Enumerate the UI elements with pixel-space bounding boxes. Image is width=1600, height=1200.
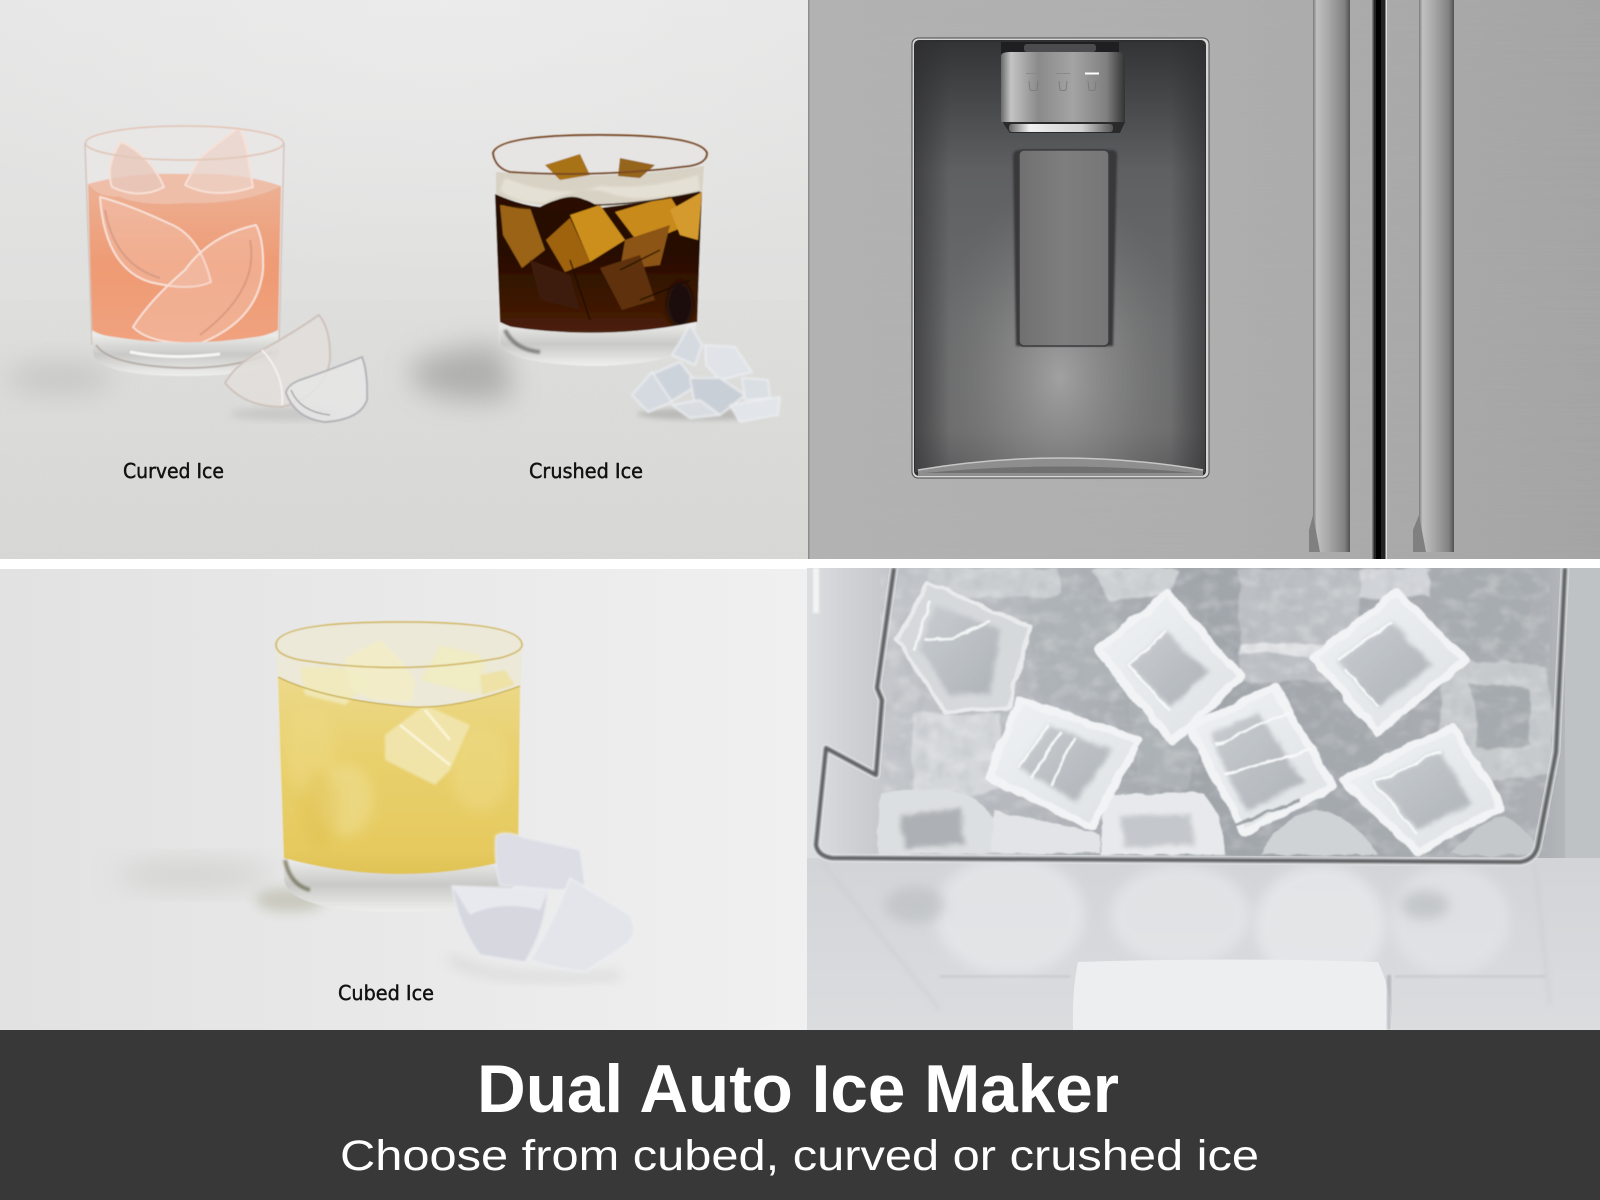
ice block: cube E xyxy=(1343,727,1502,852)
ice block: cube A xyxy=(1098,593,1241,742)
glass: curved ice drink xyxy=(85,126,284,376)
ice: cubes in glass xyxy=(300,640,515,785)
label: curved ice: Curved Ice xyxy=(123,459,224,483)
ice: curved pieces in glass xyxy=(100,128,263,343)
ice blocks: back rounded cube xyxy=(897,583,1030,712)
panel: ice bin full of cubes xyxy=(807,568,1600,1030)
label: cubed ice: Cubed Ice xyxy=(338,981,434,1005)
shadow: cubed ice glass xyxy=(115,863,275,887)
ice texture overlay xyxy=(880,568,1550,858)
dispenser head with ice mode indicators xyxy=(1001,42,1125,133)
ice above liquid xyxy=(496,166,704,207)
ice blocks: bottom row xyxy=(877,790,1540,855)
glass base xyxy=(499,322,696,366)
glass rim xyxy=(276,622,522,668)
glass rim xyxy=(86,126,284,160)
indicator: glyphs xyxy=(1029,81,1096,90)
bin handle block xyxy=(1073,960,1392,1030)
ice block: cube D xyxy=(1190,687,1333,833)
door handle: right xyxy=(1413,0,1454,552)
indicator: bars xyxy=(1026,73,1040,74)
icon: curved ice on table xyxy=(225,315,367,422)
glass base xyxy=(284,858,518,912)
shadow: curved ice glass xyxy=(5,362,115,394)
dispenser recess xyxy=(912,38,1209,478)
liquid mottling xyxy=(317,764,373,836)
dark bubbles cluster xyxy=(667,283,693,327)
drip tray lip xyxy=(918,458,1203,476)
glass rim xyxy=(493,135,707,174)
panel: curved and crushed ice drinks xyxy=(0,0,808,559)
glass: cubed ice drink xyxy=(276,622,522,912)
ice blocks: background layer xyxy=(912,568,1552,800)
heading: Dual Auto Ice Maker xyxy=(477,1051,1119,1127)
ice: amber crushed cubes xyxy=(500,154,702,310)
panel: refrigerator dispenser xyxy=(808,0,1600,559)
door gap xyxy=(1372,0,1387,559)
liquid: dark cola xyxy=(495,192,702,336)
liquid: orange drink xyxy=(88,184,281,344)
ice block: cube C xyxy=(989,700,1139,827)
side wall highlights xyxy=(813,568,819,613)
door handle: left xyxy=(1309,0,1350,552)
glass: crushed ice drink xyxy=(493,135,707,366)
subheading: Choose from cubed, curved or crushed ice xyxy=(340,1132,1259,1180)
bottom caption bar xyxy=(0,1030,1600,1200)
panel: cubed ice drink xyxy=(0,569,807,1030)
icon: cubed ice on table xyxy=(450,833,634,978)
dispenser paddle xyxy=(1013,150,1117,346)
icon: crushed ice pile xyxy=(632,325,780,422)
ice block: cube B xyxy=(1313,592,1466,732)
label: crushed ice: Crushed Ice xyxy=(529,459,643,483)
bin lower tray xyxy=(807,855,1600,1030)
glass base xyxy=(92,333,279,376)
bin inner rim xyxy=(816,568,1565,862)
liquid: yellow drink xyxy=(278,677,520,878)
shadow: crushed ice glass xyxy=(410,345,515,401)
